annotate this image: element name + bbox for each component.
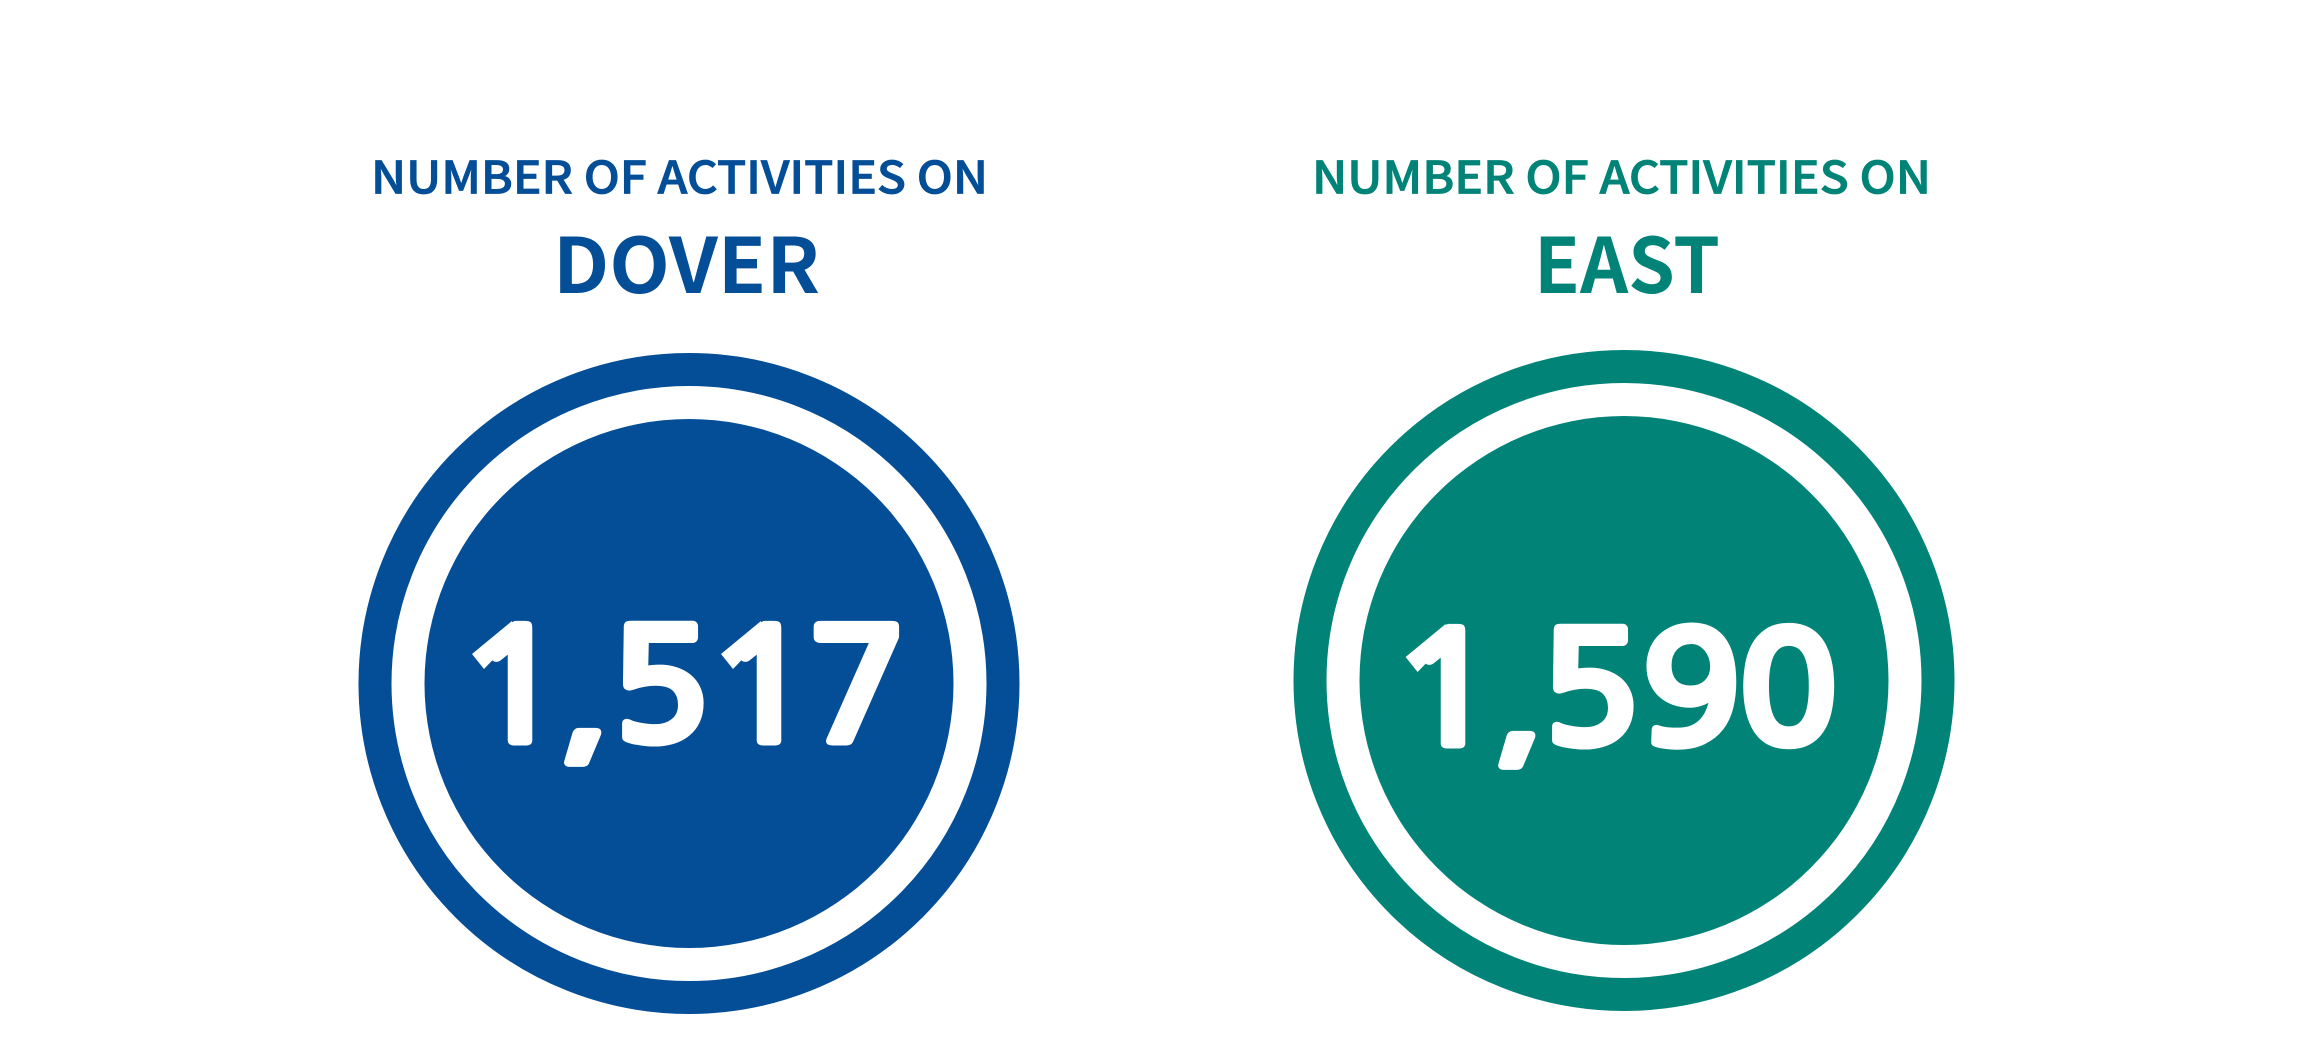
value: 1,517: 1,517 <box>465 612 908 766</box>
heading: East: EAST <box>1534 205 1720 315</box>
panel: Dover <box>371 142 1003 998</box>
outer ring <box>375 370 1003 998</box>
value: 1,590: 1,590 <box>1398 615 1839 769</box>
outer ring <box>1310 366 1938 994</box>
heading: number of activities on (East): NUMBER OF ACTIVITIES ON <box>1312 142 1931 206</box>
badge: Dover count <box>375 370 1003 998</box>
panel: East <box>1310 142 1938 994</box>
inner disc <box>424 419 954 948</box>
badge: East count <box>1310 366 1938 994</box>
inner disc <box>1360 416 1888 945</box>
heading: number of activities on (Dover): NUMBER OF ACTIVITIES ON <box>371 142 988 206</box>
heading: Dover: DOVER <box>553 205 820 315</box>
